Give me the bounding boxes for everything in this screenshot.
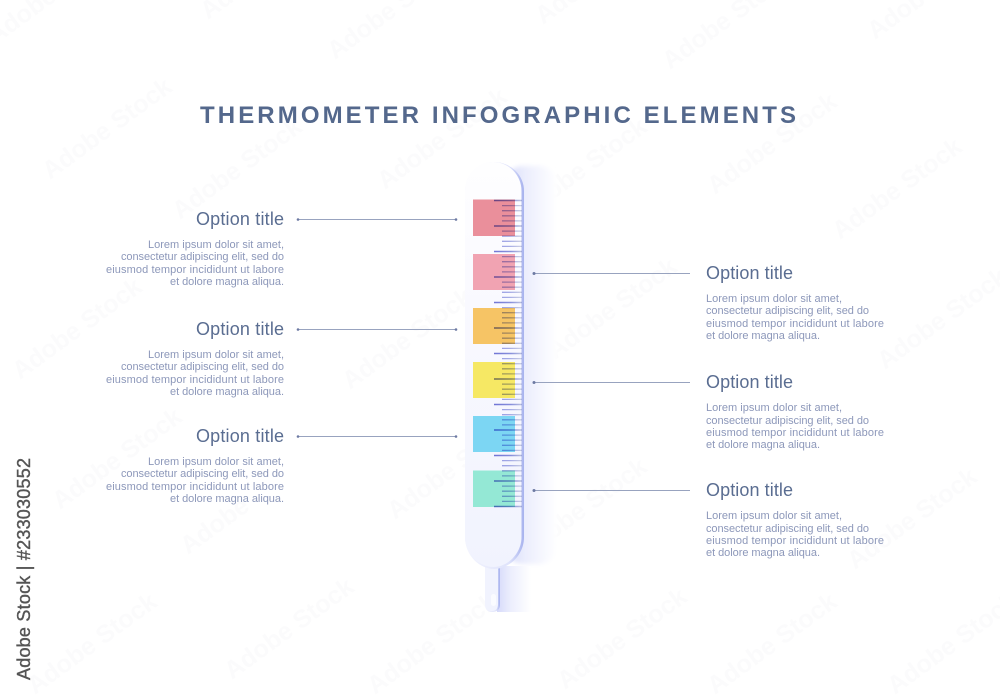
watermark: Adobe Stock xyxy=(512,112,652,225)
thermometer xyxy=(465,162,557,612)
watermark: Adobe Stock xyxy=(337,282,477,395)
thermometer body xyxy=(465,162,524,569)
swatch: mint xyxy=(473,470,515,507)
watermark: Adobe Stock xyxy=(37,72,177,185)
option title: Option title xyxy=(706,480,793,500)
description: Lorem ipsum dolor sit amet, xyxy=(148,456,284,468)
swatch: red xyxy=(473,200,515,236)
description xyxy=(106,456,284,505)
description: Lorem ipsum dolor sit amet, xyxy=(706,402,842,414)
description: Lorem ipsum dolor sit amet, xyxy=(706,510,842,522)
description: consectetur adipiscing elit, sed do xyxy=(121,361,284,373)
option title: Option title xyxy=(196,426,284,446)
option title: Option title xyxy=(196,319,284,339)
description: et dolore magna aliqua. xyxy=(170,276,284,288)
right item 3 xyxy=(532,480,884,559)
left item 1 xyxy=(106,209,457,288)
thermometer shadow xyxy=(497,166,557,612)
watermark: Adobe Stock xyxy=(372,82,512,195)
description: consectetur adipiscing elit, sed do xyxy=(121,468,284,480)
description: eiusmod tempor incididunt ut labore xyxy=(706,318,884,330)
pointer line xyxy=(297,218,457,221)
watermark: Adobe xyxy=(175,491,255,560)
pointer line xyxy=(297,435,457,438)
description: et dolore magna aliqua. xyxy=(170,493,284,505)
description xyxy=(106,239,284,288)
swatch: blue xyxy=(473,416,515,452)
right item 2 xyxy=(532,372,884,451)
thermometer minor ticks xyxy=(502,206,522,501)
option title: Option title xyxy=(196,209,284,229)
watermark: Adobe Stock xyxy=(552,582,692,695)
description xyxy=(706,293,884,342)
option title: Option title xyxy=(706,263,793,283)
watermark: Adobe Stock xyxy=(219,572,359,685)
stock credit: Adobe Stock | #233030552 xyxy=(14,458,34,680)
description: eiusmod tempor incididunt ut labore xyxy=(106,264,284,276)
watermark: Adobe Stock xyxy=(842,462,982,575)
description: consectetur adipiscing elit, sed do xyxy=(706,305,869,317)
pointer line xyxy=(532,381,690,384)
description: eiusmod tempor incididunt ut labore xyxy=(706,427,884,439)
description: eiusmod tempor incididunt ut labore xyxy=(706,535,884,547)
description: Lorem ipsum dolor sit amet, xyxy=(148,239,284,251)
pointer line xyxy=(297,328,457,331)
description: consectetur adipiscing elit, sed do xyxy=(121,251,284,263)
left item 2 xyxy=(106,319,457,398)
watermark: Adobe Stock xyxy=(542,252,682,365)
description: et dolore magna aliqua. xyxy=(706,547,820,559)
pointer line xyxy=(532,272,690,275)
description xyxy=(706,402,884,451)
pointer line xyxy=(532,489,690,492)
title: THERMOMETER INFOGRAPHIC ELEMENTS xyxy=(200,102,796,129)
description: consectetur adipiscing elit, sed do xyxy=(706,523,869,535)
swatch: yellow xyxy=(473,362,515,398)
right item 1 xyxy=(532,263,884,342)
description: eiusmod tempor incididunt ut labore xyxy=(106,374,284,386)
thermometer major ticks xyxy=(494,200,522,506)
description xyxy=(106,349,284,398)
description: consectetur adipiscing elit, sed do xyxy=(706,415,869,427)
watermark: Adobe Stock xyxy=(512,452,652,565)
description xyxy=(706,510,884,559)
description: Lorem ipsum dolor sit amet, xyxy=(706,293,842,305)
watermark: Adobe Stock xyxy=(167,112,307,225)
option title: Option title xyxy=(706,372,793,392)
watermark: Adobe Stock xyxy=(827,132,967,245)
left item 3 xyxy=(106,426,457,505)
watermark: Adobe Stock xyxy=(382,412,522,525)
description: Lorem ipsum dolor sit amet, xyxy=(148,349,284,361)
swatch: pink xyxy=(473,254,515,290)
description: et dolore magna aliqua. xyxy=(170,386,284,398)
description: et dolore magna aliqua. xyxy=(706,439,820,451)
description: et dolore magna aliqua. xyxy=(706,330,820,342)
description: eiusmod tempor incididunt ut labore xyxy=(106,481,284,493)
thermometer stem xyxy=(485,560,500,612)
swatch: orange xyxy=(473,308,515,344)
watermark: Adobe Stock xyxy=(702,87,842,200)
watermark: Adobe Stock xyxy=(47,402,187,515)
watermark: Adobe Stock xyxy=(7,272,147,385)
